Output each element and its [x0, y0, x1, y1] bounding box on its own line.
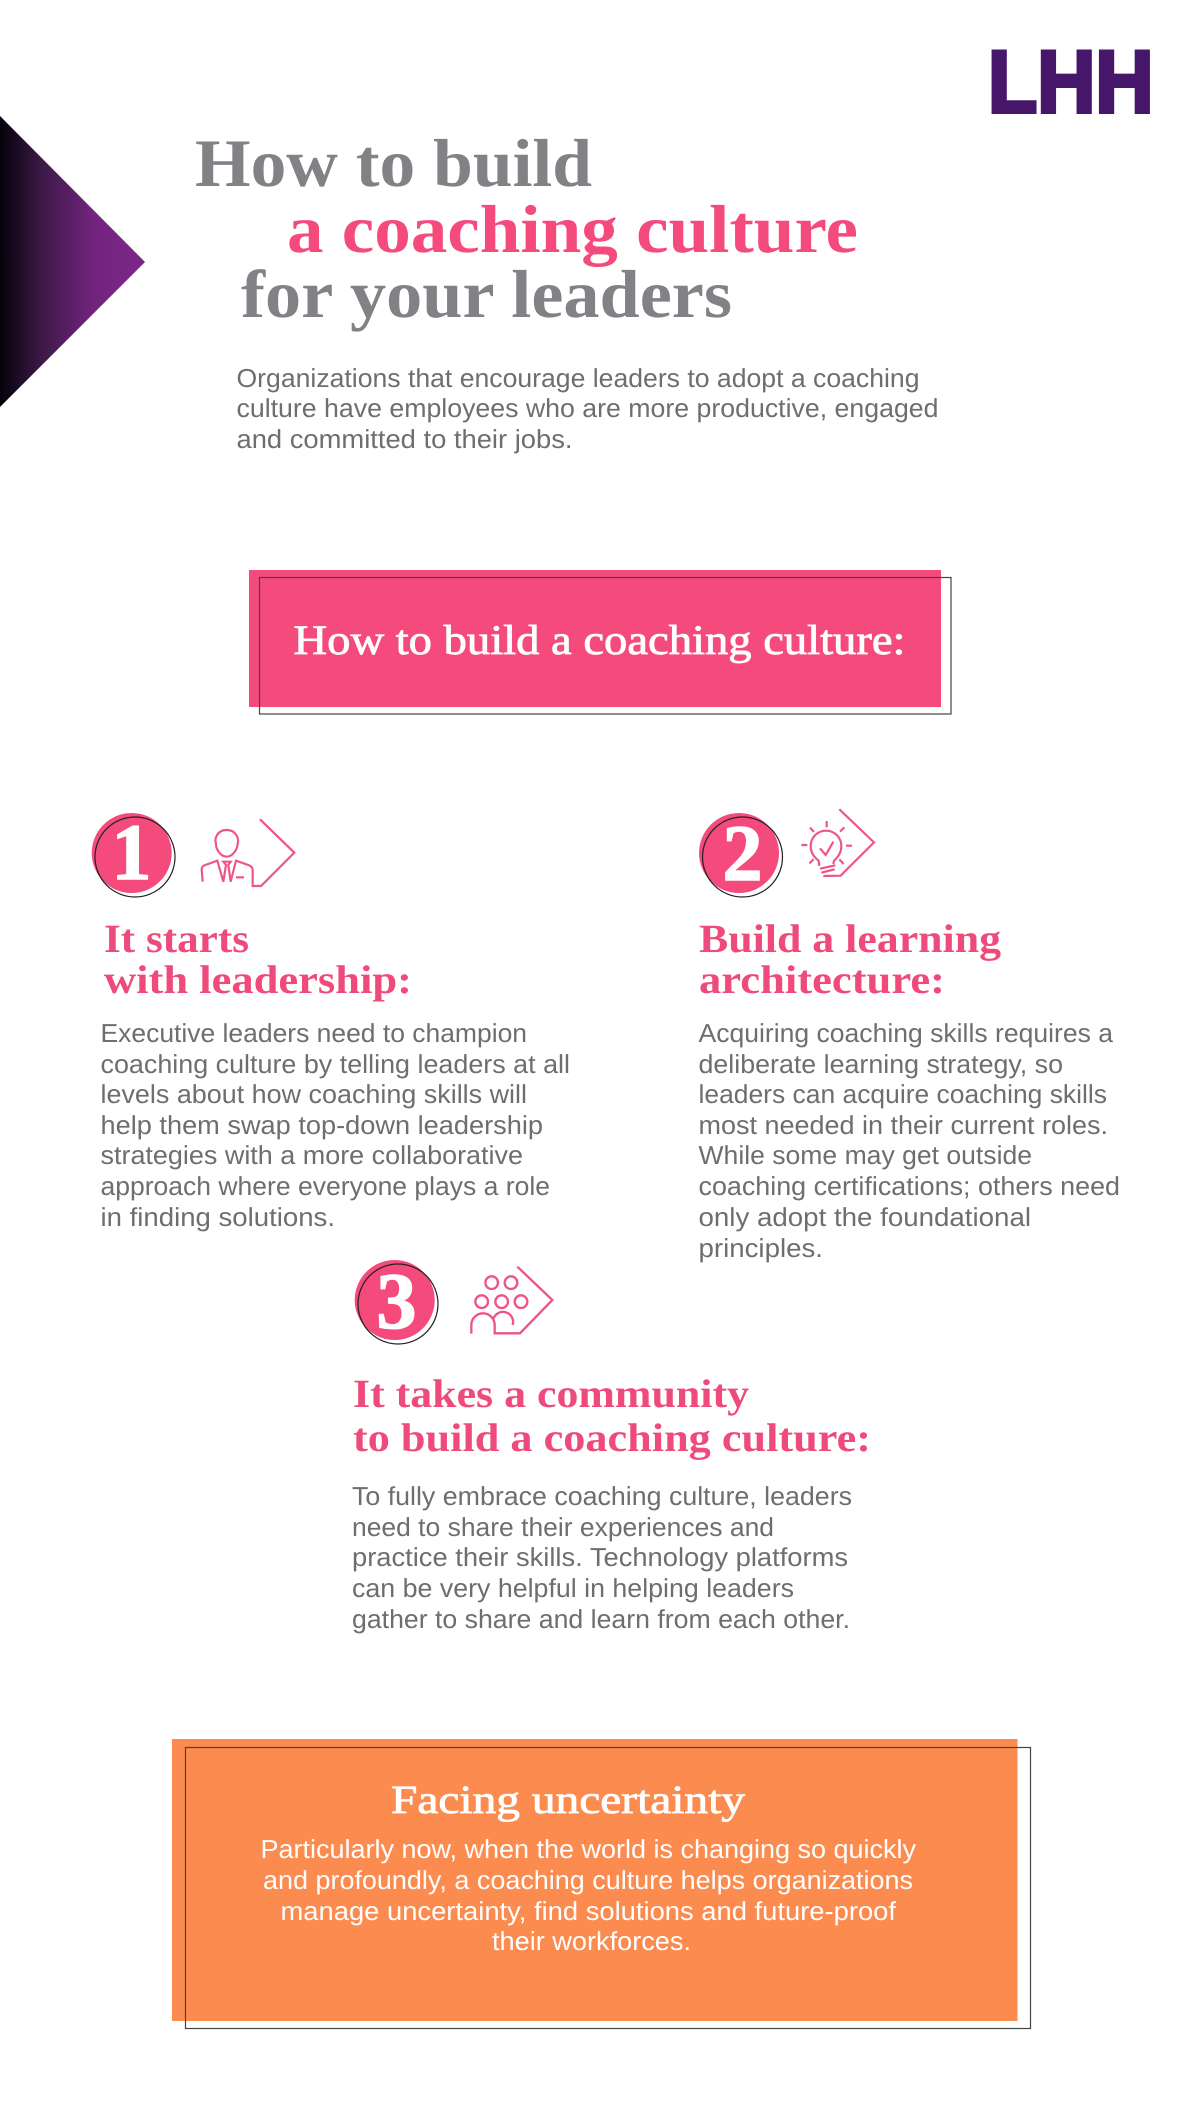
body text 1: levels about how coaching skills will: [100, 1079, 527, 1109]
body text 2: leaders can acquire coaching skills: [698, 1079, 1107, 1109]
callout text: manage uncertainty, find solutions and future-proof: [280, 1896, 897, 1926]
number badge 3: 3: [376, 1258, 416, 1346]
intro text: [236, 363, 939, 454]
number badge 3: [355, 1258, 438, 1346]
body text 1: approach where everyone plays a role: [100, 1171, 550, 1201]
body text 3: can be very helpful in helping leaders: [352, 1573, 794, 1603]
body text 1: in finding solutions.: [100, 1202, 335, 1232]
intro text: Organizations that encourage leaders to adopt a coaching: [236, 363, 920, 393]
body text 3: To fully embrace coaching culture, leaders: [352, 1481, 852, 1511]
panel: facing uncertainty callout: [172, 1739, 1030, 2028]
heading 1: with leadership:: [104, 957, 412, 1002]
body text 2: Acquiring coaching skills requires a: [698, 1018, 1114, 1048]
panel: step 3: [352, 1258, 871, 1634]
title: [195, 125, 858, 332]
number badge 1: 1: [112, 809, 152, 897]
number badge 2: [699, 810, 782, 898]
callout text: Particularly now, when the world is changing so quickly: [260, 1834, 916, 1864]
body text 2: [698, 1018, 1120, 1263]
intro text: culture have employees who are more productive, engaged: [236, 393, 939, 423]
body text 2: principles.: [698, 1233, 823, 1263]
panel: step 1: [92, 809, 570, 1232]
title: a coaching culture: [287, 191, 858, 268]
heading 1: It starts: [104, 916, 249, 961]
heading 2: [699, 916, 1001, 1002]
body text 1: help them swap top-down leadership: [100, 1110, 543, 1140]
body text 1: coaching culture by telling leaders at all: [100, 1049, 570, 1079]
body text 2: only adopt the foundational: [698, 1202, 1031, 1232]
intro text: and committed to their jobs.: [236, 424, 572, 454]
title: How to build: [195, 125, 592, 201]
heading 3: It takes a community: [353, 1371, 749, 1416]
body text 1: [100, 1018, 570, 1232]
heading 2: Build a learning: [699, 916, 1001, 961]
icon: light bulb with check and arrow: [801, 809, 874, 876]
body text 1: strategies with a more collaborative: [100, 1140, 523, 1170]
callout heading: Facing uncertainty: [391, 1777, 745, 1822]
body text 3: [352, 1481, 852, 1634]
callout text: [260, 1834, 916, 1956]
logo: LHH: LHH: [988, 32, 1154, 131]
callout text: their workforces.: [492, 1926, 691, 1956]
body text 2: coaching certifications; others need: [698, 1171, 1120, 1201]
number badge 1: [92, 809, 175, 897]
callout text: and profoundly, a coaching culture helps organizations: [263, 1865, 913, 1895]
body text 3: gather to share and learn from each other.: [352, 1604, 850, 1634]
panel: section banner: [249, 570, 951, 714]
decorative arrow: purple gradient triangle: [0, 116, 145, 407]
heading 1: [104, 916, 412, 1002]
panel: step 2: [698, 809, 1120, 1263]
icon: group of people with arrow: [471, 1267, 552, 1334]
title: for your leaders: [241, 256, 732, 332]
body text 3: need to share their experiences and: [352, 1512, 774, 1542]
body text 3: practice their skills. Technology platforms: [352, 1542, 848, 1572]
icon: leader in suit with arrow: [202, 819, 294, 886]
body text 1: Executive leaders need to champion: [100, 1018, 527, 1048]
body text 2: most needed in their current roles.: [698, 1110, 1108, 1140]
heading 3: [353, 1371, 871, 1460]
heading 2: architecture:: [699, 957, 945, 1002]
heading 3: to build a coaching culture:: [353, 1415, 871, 1460]
banner heading: How to build a coaching culture:: [294, 618, 906, 664]
body text 2: While some may get outside: [698, 1140, 1032, 1170]
number badge 2: 2: [722, 810, 762, 898]
body text 2: deliberate learning strategy, so: [698, 1049, 1063, 1079]
